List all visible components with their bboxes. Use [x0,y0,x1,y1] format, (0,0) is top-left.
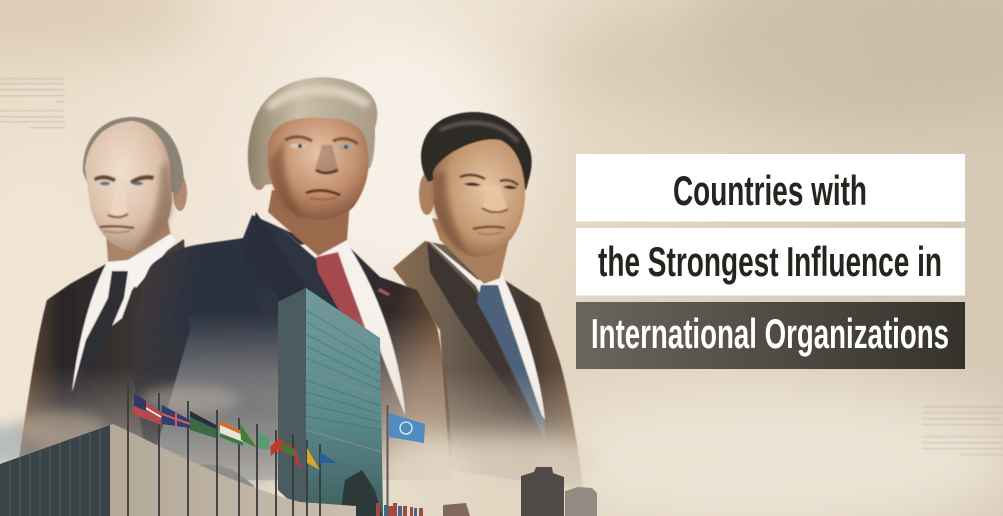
figure: right leader [393,112,583,490]
face shading [434,170,468,255]
collar [106,234,176,288]
Brazil-like flag [240,424,257,448]
tie [477,285,545,440]
title line 1 banner [576,154,965,222]
shirt [276,226,406,415]
face [433,139,525,257]
pin [378,288,390,296]
tie [72,271,128,392]
shirt [426,238,545,420]
title panel [576,154,965,369]
neck [432,218,510,284]
face [268,118,369,220]
title line 3 banner [576,302,965,369]
small distant flags [376,503,423,516]
UN flagpole and flag [388,405,425,516]
green and red flag [190,411,216,438]
suit [132,212,452,480]
title line 2 banner [576,228,965,296]
lapel [426,242,518,400]
blue flag [320,452,337,463]
neck [106,222,172,268]
figure: left leader [19,117,190,470]
facial features [94,175,154,232]
hair highlight [268,90,368,108]
India flag [220,420,243,446]
red and green flag [270,438,298,458]
shirt [71,263,136,392]
small text block: bottom right [922,406,1003,455]
row of flags and poles [128,382,337,516]
Mexico flag [258,432,269,450]
skyline buildings [443,467,597,516]
red flag [294,445,302,470]
facial features [460,175,518,234]
ear [250,150,268,190]
ear [419,173,435,215]
UN general assembly building [0,424,356,516]
lapel [254,212,261,220]
tie [316,252,366,330]
sky and clouds behind the figures [0,390,310,490]
hair [83,117,184,195]
suit [19,237,190,470]
US flag [133,393,161,425]
dust clouds over the lower figures [15,386,595,516]
facial features [285,137,358,200]
neck [268,190,350,256]
UK flag [162,405,190,428]
title line 1 banner: Countries with [673,167,867,214]
UN secretariat building [278,288,383,516]
yellow and red flag [307,448,320,470]
hair highlight [440,123,518,142]
suit [393,238,583,490]
figure: center leader [132,77,452,480]
face shading [134,160,173,251]
face shading [270,140,305,220]
hair [421,112,532,190]
hair [248,77,377,189]
small text block: top left [0,78,65,128]
ear [173,175,187,211]
face [85,121,172,251]
